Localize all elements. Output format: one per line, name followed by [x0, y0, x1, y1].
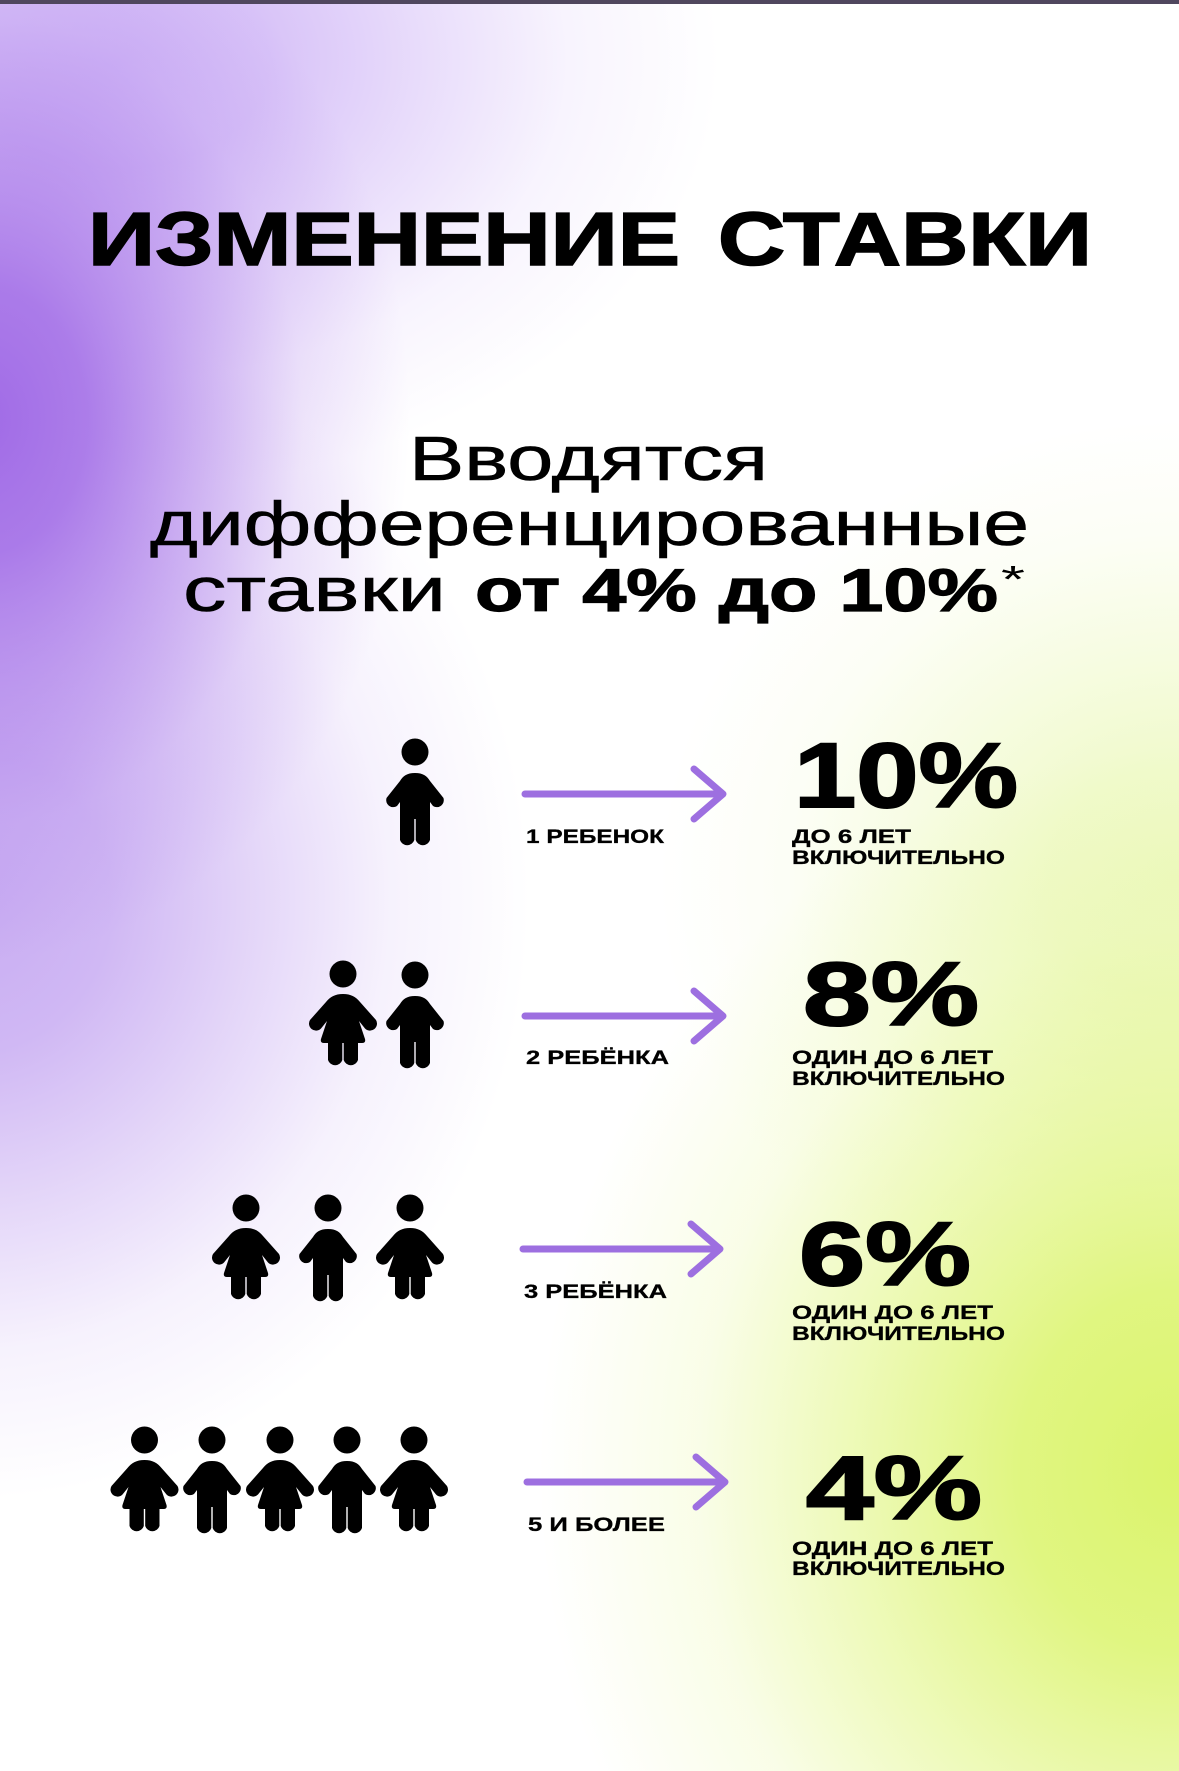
arrow [525, 991, 723, 1041]
row: 5 or more children [111, 1426, 1005, 1580]
icons: five children [111, 1426, 448, 1533]
note: ДО 6 ЛЕТ [792, 827, 912, 848]
note: ОДИН ДО 6 ЛЕТ [792, 1048, 994, 1069]
label: 5 or more: 5 И БОЛЕЕ [528, 1515, 665, 1536]
arrow [525, 769, 723, 819]
title [88, 197, 1092, 281]
note: ОДИН ДО 6 ЛЕТ [792, 1539, 994, 1560]
arrow [527, 1457, 725, 1507]
rate: 10%: 10% [794, 725, 1018, 827]
row: 2 children [309, 945, 1005, 1090]
note: ВКЛЮЧИТЕЛЬНО [792, 1069, 1005, 1090]
subtitle text block [150, 425, 1029, 625]
note [792, 1539, 1005, 1580]
note: ВКЛЮЧИТЕЛЬНО [792, 1559, 1005, 1580]
subtitle text block: дифференцированные [150, 490, 1029, 559]
subtitle text block: ставки [183, 556, 446, 625]
label: 3 children: 3 РЕБЁНКА [524, 1282, 667, 1303]
arrow [523, 1224, 720, 1274]
icon: child figure [386, 738, 444, 845]
icons: three children [212, 1194, 444, 1301]
label: 1 child: 1 РЕБЕНОК [526, 827, 665, 848]
rate: 6%: 6% [799, 1205, 971, 1305]
note: ОДИН ДО 6 ЛЕТ [792, 1303, 994, 1324]
note [792, 1048, 1005, 1090]
row: 3 children [212, 1194, 1005, 1345]
note: ВКЛЮЧИТЕЛЬНО [792, 1324, 1005, 1345]
subtitle text block: * [1001, 559, 1025, 601]
note [792, 1303, 1005, 1345]
subtitle text block: от 4% до 10% [475, 557, 998, 624]
icons: two children [309, 960, 444, 1068]
label: 2 children: 2 РЕБЁНКА [526, 1048, 669, 1069]
subtitle text block: Вводятся [409, 425, 768, 494]
note: ВКЛЮЧИТЕЛЬНО [792, 848, 1005, 869]
rate: 4%: 4% [806, 1439, 982, 1539]
rate: 8%: 8% [803, 945, 979, 1045]
title: ИЗМЕНЕНИЕ [88, 197, 680, 281]
title: СТАВКИ [718, 197, 1092, 281]
note [792, 827, 1005, 869]
row: 1 child [386, 725, 1018, 869]
